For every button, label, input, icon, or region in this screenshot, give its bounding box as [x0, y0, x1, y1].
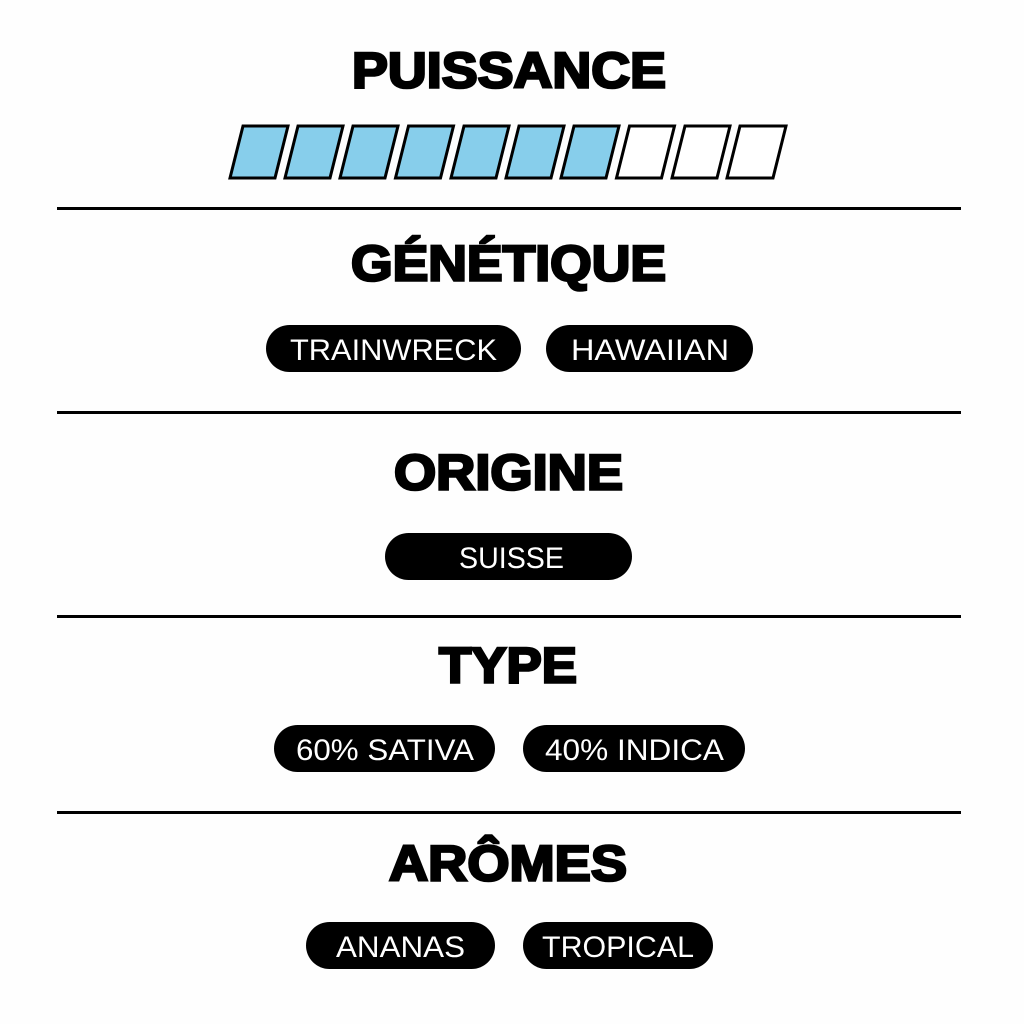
panel: origine [385, 444, 632, 580]
heading: type: TYPE [439, 638, 577, 694]
panel: génétique [266, 236, 753, 372]
tag: hawaiian: HAWAIIAN [571, 334, 729, 367]
tag: suisse [385, 533, 632, 580]
rating bar: 7 of 10 [230, 126, 786, 178]
tag: hawaiian [546, 325, 753, 372]
tag: trainwreck [266, 325, 521, 372]
tag: ananas [306, 922, 495, 969]
tag: ananas: ANANAS [336, 931, 465, 964]
tag: suisse: SUISSE [459, 542, 564, 575]
tag: 40% indica [523, 725, 745, 772]
heading: puissance: PUISSANCE [352, 42, 666, 98]
tag: 60% sativa: 60% SATIVA [296, 734, 474, 767]
panel: arômes [306, 834, 713, 969]
tag: tropical: TROPICAL [542, 931, 694, 964]
heading: origine: ORIGINE [394, 444, 623, 500]
panel: type [274, 638, 745, 772]
panel: puissance [230, 42, 786, 178]
tag: trainwreck: TRAINWRECK [290, 334, 497, 367]
heading: génétique: GÉNÉTIQUE [351, 236, 666, 292]
tag: 60% sativa [274, 725, 495, 772]
heading: arômes: ARÔMES [389, 834, 627, 892]
tag: 40% indica: 40% INDICA [545, 734, 724, 767]
tag: tropical [523, 922, 713, 969]
